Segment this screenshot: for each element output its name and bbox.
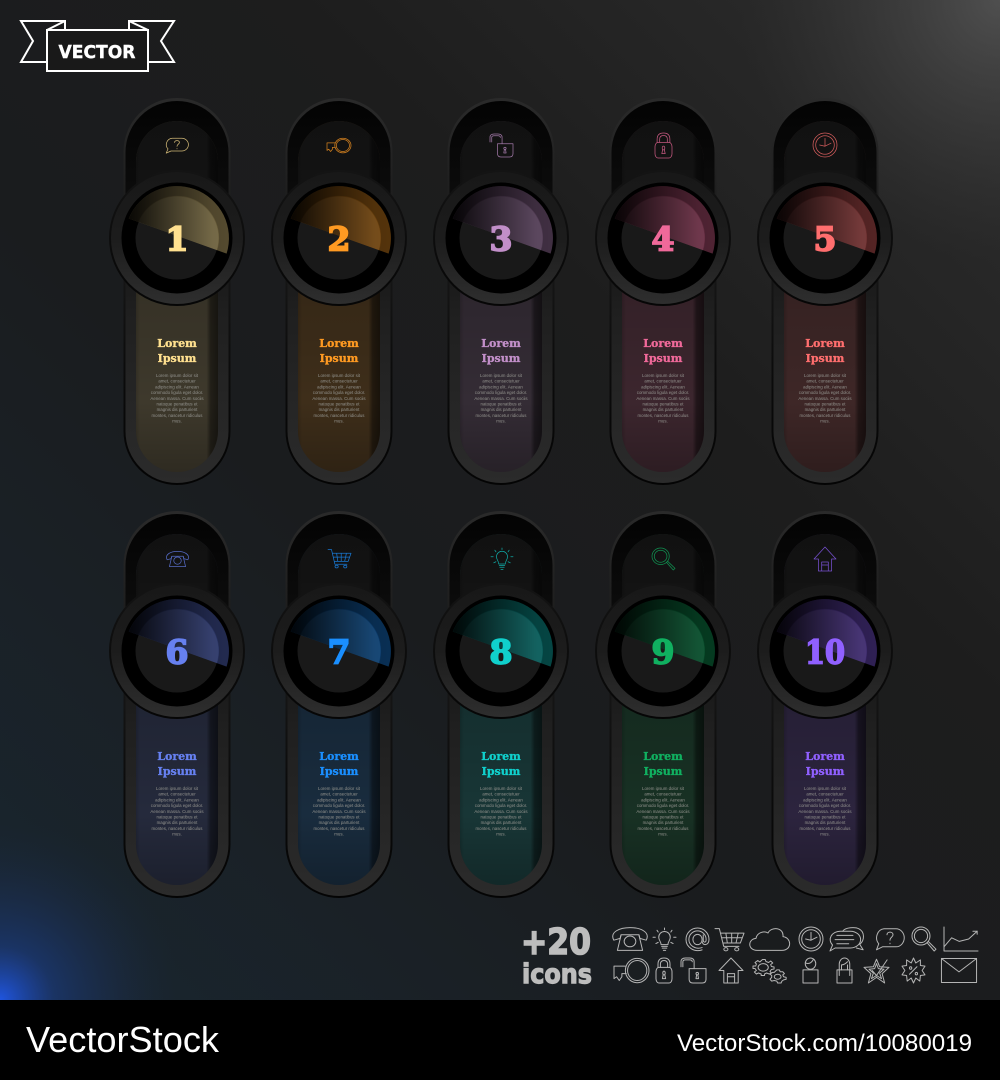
heading: Ipsum [158, 765, 197, 778]
body text: natoque penatibus et [318, 402, 360, 406]
body text: natoque penatibus et [480, 402, 522, 406]
body text: montes, nascetur ridiculus [637, 826, 689, 831]
body text: Lorem ipsum dolor sit [804, 373, 847, 378]
column 9 [595, 511, 731, 898]
body text: adipiscing elit. Aenean [155, 797, 199, 802]
+20 icons label [521, 922, 592, 990]
footer bar [0, 1000, 1000, 1080]
ribbon badge: VECTOR [21, 21, 174, 71]
body text: magnis dis parturient [643, 820, 684, 825]
heading: Lorem [481, 750, 521, 763]
body text: adipiscing elit. Aenean [317, 797, 361, 802]
body text: mus. [820, 419, 830, 424]
icon: house [814, 547, 836, 571]
number dial [757, 170, 893, 306]
footer logo text: VectorStock [26, 1019, 220, 1060]
body text: magnis dis parturient [157, 820, 198, 825]
body text: amet, consectetuer [320, 379, 358, 384]
heading: Lorem [481, 337, 521, 350]
body text: commodo ligula eget dolor. [799, 803, 851, 808]
heading: Ipsum [482, 765, 521, 778]
body text: magnis dis parturient [157, 407, 198, 412]
number dial [433, 583, 569, 719]
heading: Ipsum [806, 352, 845, 365]
body text: adipiscing elit. Aenean [479, 384, 523, 389]
body text: magnis dis parturient [481, 820, 522, 825]
column 3 [433, 98, 569, 485]
column 6 [109, 511, 245, 898]
number: 9 [652, 632, 674, 672]
heading: Ipsum [158, 352, 197, 365]
capsule panel [286, 511, 392, 898]
capsule panel [448, 511, 554, 898]
body text: mus. [658, 419, 668, 424]
body text: Aenean massa. Cum sociis [150, 809, 204, 814]
body text: Aenean massa. Cum sociis [312, 809, 366, 814]
capsule panel [286, 98, 392, 485]
body text: Aenean massa. Cum sociis [474, 396, 528, 401]
column 8 [433, 511, 569, 898]
body text: mus. [172, 832, 182, 837]
column 5 [757, 98, 893, 485]
body text: natoque penatibus et [156, 814, 198, 820]
body text: mus. [820, 832, 830, 837]
number dial [109, 170, 245, 306]
body text: natoque penatibus et [480, 814, 522, 820]
heading: Lorem [157, 337, 197, 350]
body text: montes, nascetur ridiculus [637, 413, 689, 418]
capsule panel [610, 511, 716, 898]
number dial [433, 170, 569, 306]
body text: adipiscing elit. Aenean [155, 384, 199, 389]
body text: amet, consectetuer [320, 792, 358, 797]
body text: commodo ligula eget dolor. [799, 390, 851, 395]
body text: Aenean massa. Cum sociis [474, 809, 528, 814]
number dial [109, 583, 245, 719]
heading: Ipsum [806, 765, 845, 778]
body text: adipiscing elit. Aenean [641, 384, 685, 389]
number: 8 [490, 632, 512, 672]
body text: montes, nascetur ridiculus [475, 413, 527, 418]
body text: mus. [172, 419, 182, 424]
column 10 [757, 511, 893, 898]
number dial [595, 583, 731, 719]
heading: Lorem [319, 337, 359, 350]
body text: Aenean massa. Cum sociis [636, 396, 690, 401]
icon: key [327, 138, 351, 153]
body text: montes, nascetur ridiculus [799, 413, 851, 418]
body text: commodo ligula eget dolor. [637, 390, 689, 395]
body text: commodo ligula eget dolor. [475, 390, 527, 395]
number: 3 [490, 220, 512, 258]
ribbon badge: VECTOR: VECTOR [58, 42, 136, 63]
column 4 [595, 98, 731, 485]
body text: natoque penatibus et [156, 402, 198, 406]
body text: mus. [496, 832, 506, 837]
body text: Aenean massa. Cum sociis [636, 809, 690, 814]
body text: magnis dis parturient [805, 407, 846, 412]
body text: adipiscing elit. Aenean [317, 384, 361, 389]
number: 6 [166, 632, 188, 672]
body text: montes, nascetur ridiculus [151, 413, 203, 418]
heading: Lorem [805, 750, 845, 763]
heading: Lorem [319, 750, 359, 763]
body text: commodo ligula eget dolor. [151, 803, 203, 808]
body text: Lorem ipsum dolor sit [156, 786, 199, 791]
heading: Ipsum [320, 765, 359, 778]
heading: Ipsum [320, 352, 359, 365]
body text: Lorem ipsum dolor sit [318, 373, 361, 378]
number: 4 [652, 220, 674, 258]
heading: Lorem [643, 337, 683, 350]
capsule panel [610, 98, 716, 485]
number: 1 [166, 220, 188, 258]
body text: Aenean massa. Cum sociis [150, 396, 204, 401]
body text: magnis dis parturient [481, 407, 522, 412]
number dial [271, 170, 407, 306]
number dial [271, 583, 407, 719]
body text: commodo ligula eget dolor. [151, 390, 203, 395]
body text: magnis dis parturient [805, 820, 846, 825]
body text: adipiscing elit. Aenean [803, 384, 847, 389]
body text: natoque penatibus et [642, 814, 684, 820]
body text: amet, consectetuer [158, 792, 196, 797]
icon: magnifier [652, 548, 675, 570]
body text: mus. [496, 419, 506, 424]
body text: montes, nascetur ridiculus [313, 413, 365, 418]
body text: amet, consectetuer [644, 792, 682, 797]
body text: Aenean massa. Cum sociis [798, 809, 852, 814]
number: 5 [814, 220, 836, 258]
column 1 [109, 98, 245, 485]
heading: Ipsum [644, 352, 683, 365]
body text: mus. [334, 419, 344, 424]
heading: Lorem [643, 750, 683, 763]
icon: padlock [655, 133, 672, 158]
icon: telephone [166, 551, 189, 567]
body text: natoque penatibus et [804, 814, 846, 820]
number: 2 [328, 220, 350, 258]
number: 10 [805, 632, 845, 672]
body text: amet, consectetuer [806, 792, 844, 797]
body text: amet, consectetuer [806, 379, 844, 384]
body text: adipiscing elit. Aenean [641, 797, 685, 802]
body text: commodo ligula eget dolor. [637, 803, 689, 808]
body text: commodo ligula eget dolor. [475, 803, 527, 808]
body text: Lorem ipsum dolor sit [318, 786, 361, 791]
body text: Lorem ipsum dolor sit [480, 786, 523, 791]
+20 icons label: icons [522, 959, 592, 990]
body text: commodo ligula eget dolor. [313, 390, 365, 395]
icon: question bubble [166, 138, 188, 153]
body text: natoque penatibus et [804, 402, 846, 406]
column 7 [271, 511, 407, 898]
capsule panel [772, 98, 878, 485]
body text: montes, nascetur ridiculus [799, 826, 851, 831]
body text: mus. [658, 832, 668, 837]
body text: natoque penatibus et [642, 402, 684, 406]
body text: Lorem ipsum dolor sit [642, 373, 685, 378]
body text: magnis dis parturient [319, 407, 360, 412]
body text: Lorem ipsum dolor sit [480, 373, 523, 378]
number dial [757, 583, 893, 719]
body text: amet, consectetuer [158, 379, 196, 384]
body text: amet, consectetuer [644, 379, 682, 384]
body text: adipiscing elit. Aenean [803, 797, 847, 802]
+20 icons label: +20 [521, 922, 591, 963]
body text: Aenean massa. Cum sociis [312, 396, 366, 401]
capsule panel [772, 511, 878, 898]
heading: Lorem [805, 337, 845, 350]
body text: montes, nascetur ridiculus [151, 826, 203, 831]
heading: Ipsum [482, 352, 521, 365]
icon: light bulb [491, 548, 513, 569]
icon set [613, 927, 978, 983]
heading: Ipsum [644, 765, 683, 778]
number: 7 [328, 632, 350, 672]
capsule panel [124, 511, 230, 898]
icon: shopping cart [328, 549, 351, 568]
body text: adipiscing elit. Aenean [479, 797, 523, 802]
body text: natoque penatibus et [318, 814, 360, 820]
icon: open padlock [490, 134, 513, 157]
body text: mus. [334, 832, 344, 837]
body text: magnis dis parturient [643, 407, 684, 412]
body text: montes, nascetur ridiculus [313, 826, 365, 831]
body text: Lorem ipsum dolor sit [156, 373, 199, 378]
icon: clock [813, 133, 837, 157]
body text: magnis dis parturient [319, 820, 360, 825]
body text: amet, consectetuer [482, 379, 520, 384]
body text: montes, nascetur ridiculus [475, 826, 527, 831]
footer url text: VectorStock.com/10080019 [677, 1030, 972, 1057]
capsule panel [124, 98, 230, 485]
number dial [595, 170, 731, 306]
body text: Lorem ipsum dolor sit [804, 786, 847, 791]
body text: Aenean massa. Cum sociis [798, 396, 852, 401]
capsule panel [448, 98, 554, 485]
body text: amet, consectetuer [482, 792, 520, 797]
body text: commodo ligula eget dolor. [313, 803, 365, 808]
column 2 [271, 98, 407, 485]
body text: Lorem ipsum dolor sit [642, 786, 685, 791]
heading: Lorem [157, 750, 197, 763]
